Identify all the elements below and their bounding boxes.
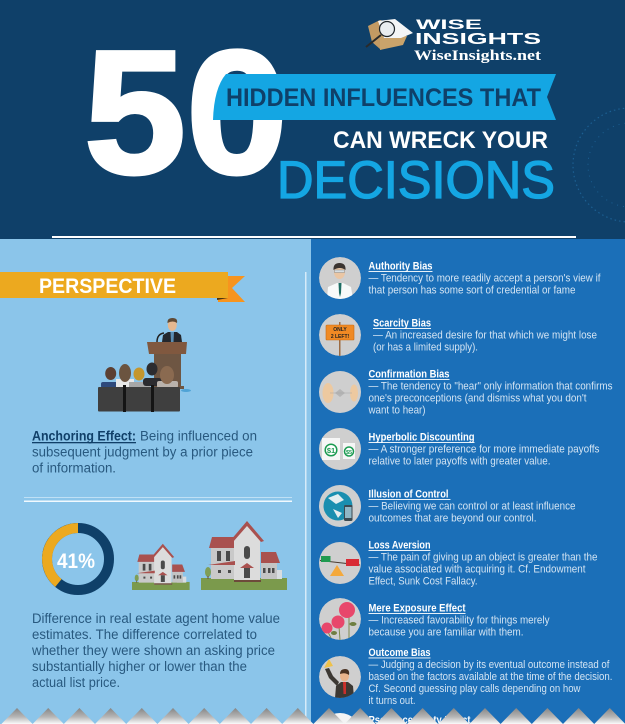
- text: outcome bias: Cf. Second guessing play calls depending on how: [368, 683, 581, 695]
- text: confirmation bias: one's preconceptions (and dismiss what you don't: [368, 392, 586, 404]
- text: authority bias: Authority Bias: [368, 260, 432, 272]
- logo word WISE: WISE: [416, 16, 482, 32]
- text: illusion of control: Illusion of Control: [368, 488, 448, 500]
- text: mere exposure effect: [368, 602, 550, 638]
- text: hyperbolic discounting: relative to later payoffs with greater value.: [368, 456, 550, 468]
- title line 2: CAN WRECK YOUR: [333, 127, 548, 154]
- background: header: [0, 0, 625, 239]
- icon: scarcity sign: [319, 314, 361, 358]
- icon: ears: [319, 371, 361, 413]
- donut value: 41%: [57, 550, 95, 573]
- text: anchoring effect: Anchoring Effect:: [32, 428, 136, 444]
- text: home value difference: Difference in real estate agent home value: [32, 611, 280, 626]
- text: anchoring effect: of information.: [32, 460, 116, 476]
- text: loss aversion: Loss Aversion: [368, 540, 430, 552]
- text: hyperbolic discounting: [368, 432, 600, 468]
- text: home value difference: substantially higher or lower than the: [32, 659, 247, 674]
- background: right panel: [311, 239, 625, 724]
- icon: large house: [201, 521, 287, 590]
- icon: doctor: [319, 257, 361, 299]
- icon: balance scale: [319, 542, 361, 584]
- text: loss aversion: [368, 540, 598, 588]
- text: home value difference: [31, 611, 280, 690]
- logo word INSIGHTS: INSIGHTS: [415, 31, 542, 48]
- text: authority bias: — Tendency to more readily accept a person's view if: [368, 272, 601, 284]
- donut chart: 41%: [47, 528, 109, 590]
- text: anchoring effect: Being influenced on: [140, 428, 257, 444]
- text: authority bias: [368, 260, 601, 296]
- text: mere exposure effect: — Increased favorability for things merely: [368, 614, 550, 626]
- icon: globe and phone: [319, 485, 361, 527]
- text: scarcity bias: (or has a limited supply).: [373, 342, 478, 354]
- text: mere exposure effect: Mere Exposure Effect: [368, 602, 466, 614]
- heading: PERSPECTIVE: [39, 275, 176, 298]
- torn paper edge: [1, 708, 625, 724]
- title ribbon: [213, 74, 556, 120]
- title number 50: 50: [84, 15, 288, 211]
- text: scarcity bias: — An increased desire for that which we might lose: [373, 330, 597, 342]
- text: outcome bias: it turns out.: [368, 695, 416, 707]
- banner: perspective: [0, 272, 245, 302]
- icon: roses: [319, 598, 361, 640]
- text: anchoring effect: subsequent judgment by a prior piece: [32, 444, 253, 460]
- icon: dollars: $5: [346, 450, 352, 456]
- text: authority bias: that person has some sort of credential or fame: [368, 284, 576, 296]
- text: mere exposure effect: because you are familiar with them.: [368, 626, 524, 638]
- text: scarcity bias: Scarcity Bias: [373, 318, 431, 330]
- logo: [366, 16, 542, 64]
- text: outcome bias: Outcome Bias: [368, 647, 430, 659]
- icon: magnifier on box: [366, 19, 413, 50]
- text: illusion of control: outcomes that are beyond our control.: [368, 512, 536, 524]
- decorative globe: [573, 108, 625, 222]
- text: hyperbolic discounting: Hyperbolic Discounting: [368, 432, 474, 444]
- icon: dollars: $1: [327, 446, 335, 455]
- text: anchoring effect: [32, 428, 257, 476]
- text: confirmation bias: Confirmation Bias: [368, 368, 450, 380]
- text: hyperbolic discounting: — A stronger preference for more immediate payoffs: [368, 444, 600, 456]
- text: loss aversion: value associated with acquiring it. Cf. Endowment: [368, 564, 586, 576]
- icon: cut-off next item: [319, 713, 361, 724]
- text: loss aversion: Effect, Sunk Cost Fallacy.: [368, 576, 478, 588]
- text: illusion of control: [368, 488, 576, 524]
- text: loss aversion: — The pain of giving up an object is greater than the: [368, 552, 598, 564]
- text: home value difference: estimates. The difference correlated to: [32, 627, 257, 642]
- icon: scarcity sign: 2 LEFT!: [331, 334, 349, 340]
- ribbon text: HIDDEN INFLUENCES THAT: [226, 84, 541, 112]
- icon: man ringing bell: [319, 656, 361, 698]
- text: home value difference: whether they were shown an asking price: [31, 643, 275, 658]
- text: illusion of control: — Believing we can control or at least influence: [368, 500, 576, 512]
- title line 3: DECISIONS: [277, 151, 555, 210]
- icon: scarcity sign: ONLY: [333, 327, 347, 333]
- icon: dollars: [319, 428, 361, 470]
- illustration: speaker at podium with audience: [98, 318, 191, 412]
- text: home value difference: actual list price.: [32, 675, 120, 690]
- background: left panel: [0, 239, 311, 724]
- text: confirmation bias: [368, 368, 613, 416]
- text: scarcity bias: [373, 318, 597, 354]
- icon: small house: [132, 544, 190, 590]
- logo url: WiseInsights.net: [414, 48, 541, 64]
- text: outcome bias: [368, 647, 612, 707]
- text: confirmation bias: want to hear): [368, 404, 426, 416]
